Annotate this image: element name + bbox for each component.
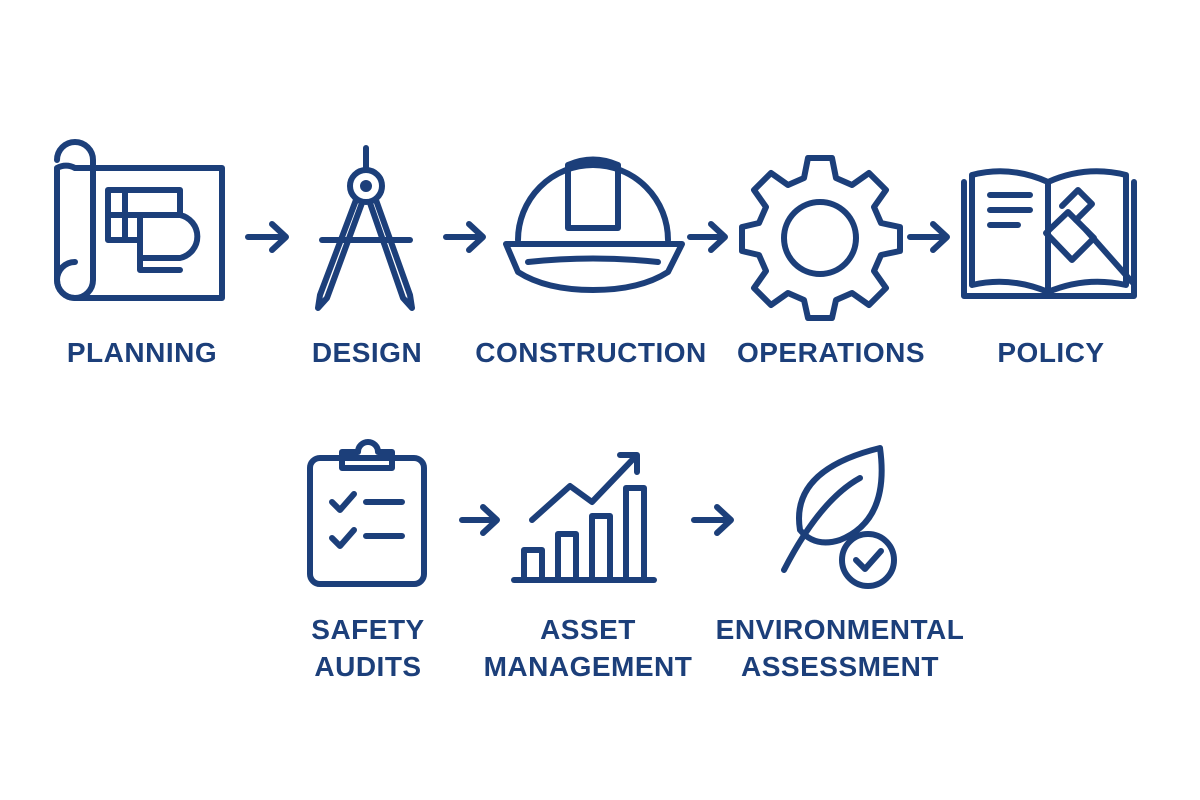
label: environmental assessment: ENVIRONMENTAL [716, 614, 964, 645]
label: policy: POLICY [997, 337, 1105, 368]
arrow 3 [690, 224, 725, 250]
label: safety audits: AUDITS [314, 651, 422, 682]
arrow 2 [446, 224, 483, 250]
icon: asset management chart [514, 455, 654, 580]
label: construction: CONSTRUCTION [475, 337, 707, 368]
arrow 4 [910, 224, 947, 250]
label: operations: OPERATIONS [737, 337, 925, 368]
label: planning: PLANNING [67, 337, 217, 368]
icon: construction helmet [506, 160, 682, 290]
icon: safety audits clipboard [310, 442, 424, 584]
icon: design compass [318, 148, 412, 308]
label: asset management: MANAGEMENT [484, 651, 692, 682]
icon: policy book with gavel [964, 171, 1134, 296]
icon: environmental leaf with check [784, 448, 894, 586]
label: safety audits: SAFETY [311, 614, 425, 645]
arrow 1 [248, 224, 286, 250]
label: asset management: ASSET [540, 614, 636, 645]
label: design: DESIGN [312, 337, 422, 368]
icon: planning blueprint [57, 142, 222, 298]
arrow 6 [694, 507, 731, 533]
label: environmental assessment: ASSESSMENT [741, 651, 939, 682]
arrow 5 [462, 507, 497, 533]
icon: operations gear [742, 158, 900, 318]
